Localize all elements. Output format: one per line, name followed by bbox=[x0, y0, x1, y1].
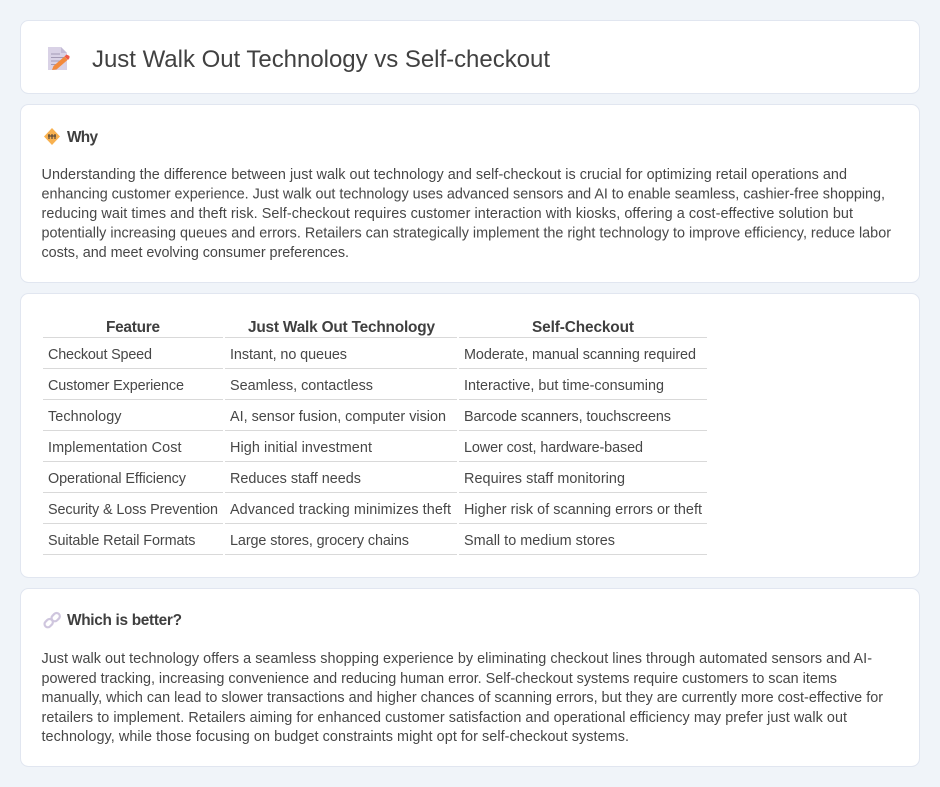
row: technology: Barcode scanners, touchscreens bbox=[464, 409, 671, 425]
text block: which is better paragraph: Just walk out technology offers a seamless shopping experience by eliminating checkout lines through automated sensors and AI- bbox=[42, 651, 872, 667]
heading: why: Why bbox=[67, 129, 98, 146]
row: security and loss prevention: Higher risk of scanning errors or theft bbox=[464, 502, 702, 518]
icon: diamond sign bbox=[44, 128, 60, 145]
row: customer experience: Seamless, contactless bbox=[230, 378, 373, 394]
row: suitable retail formats bbox=[43, 533, 707, 554]
icon: document with pencil bbox=[48, 47, 70, 70]
row: implementation cost: High initial investment bbox=[230, 440, 372, 456]
row: security and loss prevention: Security & Loss Prevention bbox=[48, 502, 218, 518]
row: security and loss prevention: Advanced tracking minimizes theft bbox=[230, 502, 451, 518]
text block: why paragraph: potentially increasing queues and errors. Retailers can strategically implement the right technology to improve efficiency, reduce labor bbox=[42, 226, 891, 242]
row: checkout speed bbox=[43, 347, 707, 368]
text block: which is better paragraph: retailers to implement. Retailers aiming for enhanced customer satisfaction and operational efficiency may prefer just walk out bbox=[42, 710, 847, 726]
text block: why paragraph: Understanding the difference between just walk out technology and self-checkout is crucial for optimizing retail operations and bbox=[42, 167, 847, 183]
text block: which is better paragraph: powered tracking, increasing convenience and reducing human error. Self-checkout systems require customers to scan items bbox=[42, 671, 837, 687]
table header row: Feature bbox=[106, 319, 160, 336]
row: suitable retail formats: Suitable Retail Formats bbox=[48, 533, 196, 549]
text block: why paragraph: reducing wait times and theft risk. Self-checkout requires customer interaction with kiosks, offering a cost-effective solution but bbox=[42, 206, 853, 222]
text block: why paragraph bbox=[42, 167, 891, 261]
text block: which is better paragraph: technology, while those focusing on budget constraints might opt for self-checkout systems. bbox=[42, 729, 629, 745]
panel: why bbox=[20, 104, 920, 282]
text block: which is better paragraph: manually, which can lead to slower transactions and higher chances of scanning errors, but they are currently more cost-effective for bbox=[42, 690, 883, 706]
row: checkout speed: Moderate, manual scanning required bbox=[464, 347, 696, 363]
row: suitable retail formats: Small to medium stores bbox=[464, 533, 615, 549]
table header row: Self-Checkout bbox=[532, 319, 634, 336]
row: suitable retail formats: Large stores, grocery chains bbox=[230, 533, 409, 549]
row: customer experience bbox=[43, 378, 707, 400]
row: operational efficiency: Reduces staff needs bbox=[230, 471, 361, 487]
text block: why paragraph: enhancing customer experience. Just walk out technology uses advanced sensors and AI to enable seamless, cashier-free shopping, bbox=[42, 186, 885, 202]
row: implementation cost bbox=[43, 440, 707, 462]
icon: link bbox=[43, 612, 61, 629]
row: implementation cost: Lower cost, hardware-based bbox=[464, 440, 643, 456]
row: security and loss prevention bbox=[43, 502, 707, 524]
row: checkout speed: Checkout Speed bbox=[48, 347, 152, 363]
row: operational efficiency bbox=[43, 471, 707, 492]
row: implementation cost: Implementation Cost bbox=[48, 440, 182, 456]
row: technology: Technology bbox=[48, 409, 122, 425]
text block: which is better paragraph bbox=[42, 651, 883, 745]
table header row bbox=[43, 319, 707, 338]
panel: title header bbox=[20, 20, 920, 94]
title: Just Walk Out Technology vs Self-checkout bbox=[92, 46, 550, 73]
row: customer experience: Customer Experience bbox=[48, 378, 184, 394]
row: technology: AI, sensor fusion, computer vision bbox=[230, 409, 446, 425]
table header row: Just Walk Out Technology bbox=[248, 319, 435, 336]
panel: which is better bbox=[20, 588, 920, 766]
row: checkout speed: Instant, no queues bbox=[230, 347, 347, 363]
row: technology bbox=[43, 409, 707, 430]
panel: comparison table bbox=[20, 294, 920, 578]
row: operational efficiency: Operational Efficiency bbox=[48, 471, 187, 487]
heading: which is better: Which is better? bbox=[67, 612, 182, 629]
row: operational efficiency: Requires staff monitoring bbox=[464, 471, 625, 487]
row: customer experience: Interactive, but time-consuming bbox=[464, 378, 664, 394]
text block: why paragraph: costs, and meet evolving consumer preferences. bbox=[42, 245, 349, 261]
